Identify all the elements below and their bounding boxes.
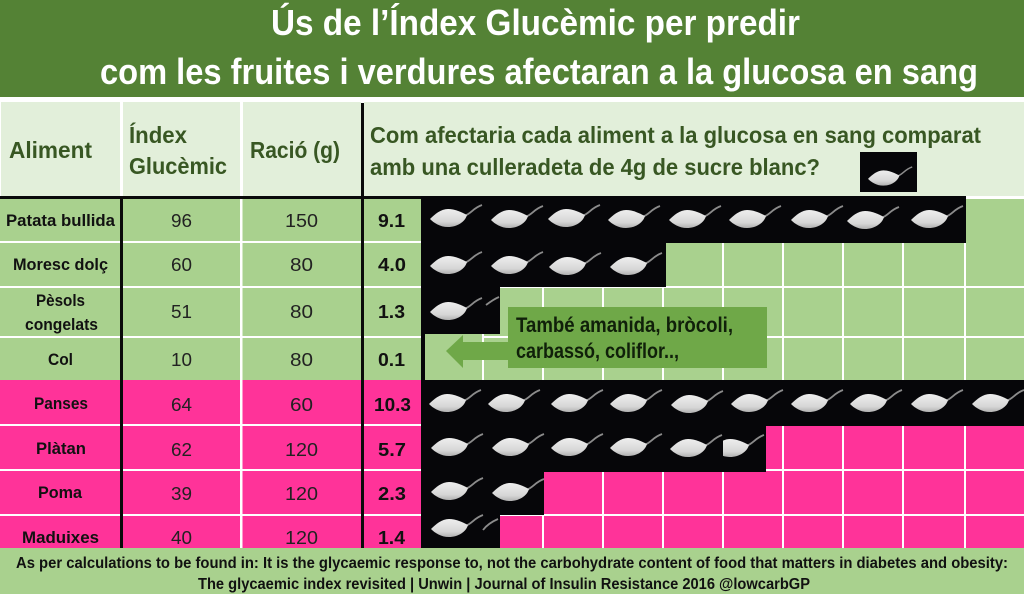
table header row: Índex xyxy=(129,121,187,148)
row: Moresc dolç: 4.0 xyxy=(378,254,406,275)
row: Pèsols congelats: 80 xyxy=(290,301,313,322)
table header row: Com afectaria cada aliment a la glucosa en sang comparat xyxy=(370,122,981,148)
row: Col: 80 xyxy=(290,349,313,370)
row: Patata bullida xyxy=(6,210,405,231)
table column rules xyxy=(0,103,422,548)
sugar spoons: Moresc dolç xyxy=(421,243,666,287)
callout: other vegetables xyxy=(508,307,767,368)
row: Plàtan: 120 xyxy=(285,439,318,460)
sugar spoons: Panses xyxy=(421,380,1024,426)
icon: legend sugar teaspoon xyxy=(860,152,917,192)
table header row: Glucèmic xyxy=(129,153,227,179)
row: Maduixes: 120 xyxy=(285,527,318,548)
table header row: Ració (g) xyxy=(250,137,340,163)
row: Moresc dolç xyxy=(13,254,406,275)
row: Panses xyxy=(34,394,411,415)
row: Poma: 120 xyxy=(285,483,318,504)
footer citation xyxy=(0,548,1024,594)
row: Maduixes: 40 xyxy=(171,527,192,548)
row: Moresc dolç: Moresc dolç xyxy=(13,255,108,274)
title banner: Ús de l’Índex Glucèmic per predir xyxy=(271,1,800,43)
sugar spoons: Patata bullida xyxy=(421,196,966,243)
row: Moresc dolç: 80 xyxy=(290,254,313,275)
row: Panses: 60 xyxy=(290,394,313,415)
row: Patata bullida: Patata bullida xyxy=(6,211,116,230)
row: Pèsols congelats: Pèsols xyxy=(36,291,85,310)
callout: other vegetables: carbassó, coliflor.., xyxy=(516,340,679,363)
footer citation: The glycaemic index revisited | Unwin | Journal of Insulin Resistance 2016 @lowcarbGP xyxy=(198,576,810,593)
row: Plàtan: Plàtan xyxy=(36,439,86,458)
row: Plàtan: 62 xyxy=(171,439,192,460)
row: Maduixes xyxy=(22,527,406,548)
callout: other vegetables: També amanida, bròcoli, xyxy=(516,314,733,337)
row: Pèsols congelats xyxy=(25,291,405,334)
sugar spoons: Plàtan xyxy=(421,426,766,472)
row: Maduixes: 1.4 xyxy=(378,527,406,548)
row: Pèsols congelats: congelats xyxy=(25,315,98,334)
row: Poma: 39 xyxy=(171,483,192,504)
footer citation: As per calculations to be found in: It is the glycaemic response to, not the carbohydrate content of food that matters in diabetes and obesity: xyxy=(16,555,1008,572)
row: Panses: Panses xyxy=(34,394,88,413)
sugar spoon sliver: Col xyxy=(421,334,425,380)
row: Col: 0.1 xyxy=(378,349,405,370)
row: Panses: 10.3 xyxy=(374,394,411,415)
row: Panses: 64 xyxy=(171,394,192,415)
row: Col xyxy=(48,349,405,370)
row: Maduixes: Maduixes xyxy=(22,528,99,547)
sugar spoons: Poma xyxy=(421,471,544,515)
row: Pèsols congelats: 1.3 xyxy=(378,301,405,322)
row: Plàtan xyxy=(36,439,406,460)
table header row: amb una culleradeta de 4g de sucre blanc? xyxy=(370,154,820,180)
sugar spoons: Maduixes xyxy=(421,515,500,548)
sugar spoons: Pèsols congelats xyxy=(421,287,500,334)
row: Plàtan: 5.7 xyxy=(378,439,406,460)
row: Patata bullida: 96 xyxy=(171,210,192,231)
arrow: points to Col row xyxy=(446,335,510,368)
row: Patata bullida: 9.1 xyxy=(378,210,405,231)
row: Col: 10 xyxy=(171,349,192,370)
panel: vegetables rows background xyxy=(0,199,1024,380)
row: Patata bullida: 150 xyxy=(285,210,318,231)
row: Poma: 2.3 xyxy=(378,483,406,504)
table header row: Aliment xyxy=(9,137,92,163)
row: Poma: Poma xyxy=(38,483,83,502)
title banner xyxy=(0,0,1024,97)
table header row xyxy=(1,102,1024,196)
panel: fruit rows background xyxy=(0,380,1024,548)
row: Moresc dolç: 60 xyxy=(171,254,192,275)
row: Col: Col xyxy=(48,350,73,369)
row: Poma xyxy=(38,483,406,504)
row: Pèsols congelats: 51 xyxy=(171,301,192,322)
